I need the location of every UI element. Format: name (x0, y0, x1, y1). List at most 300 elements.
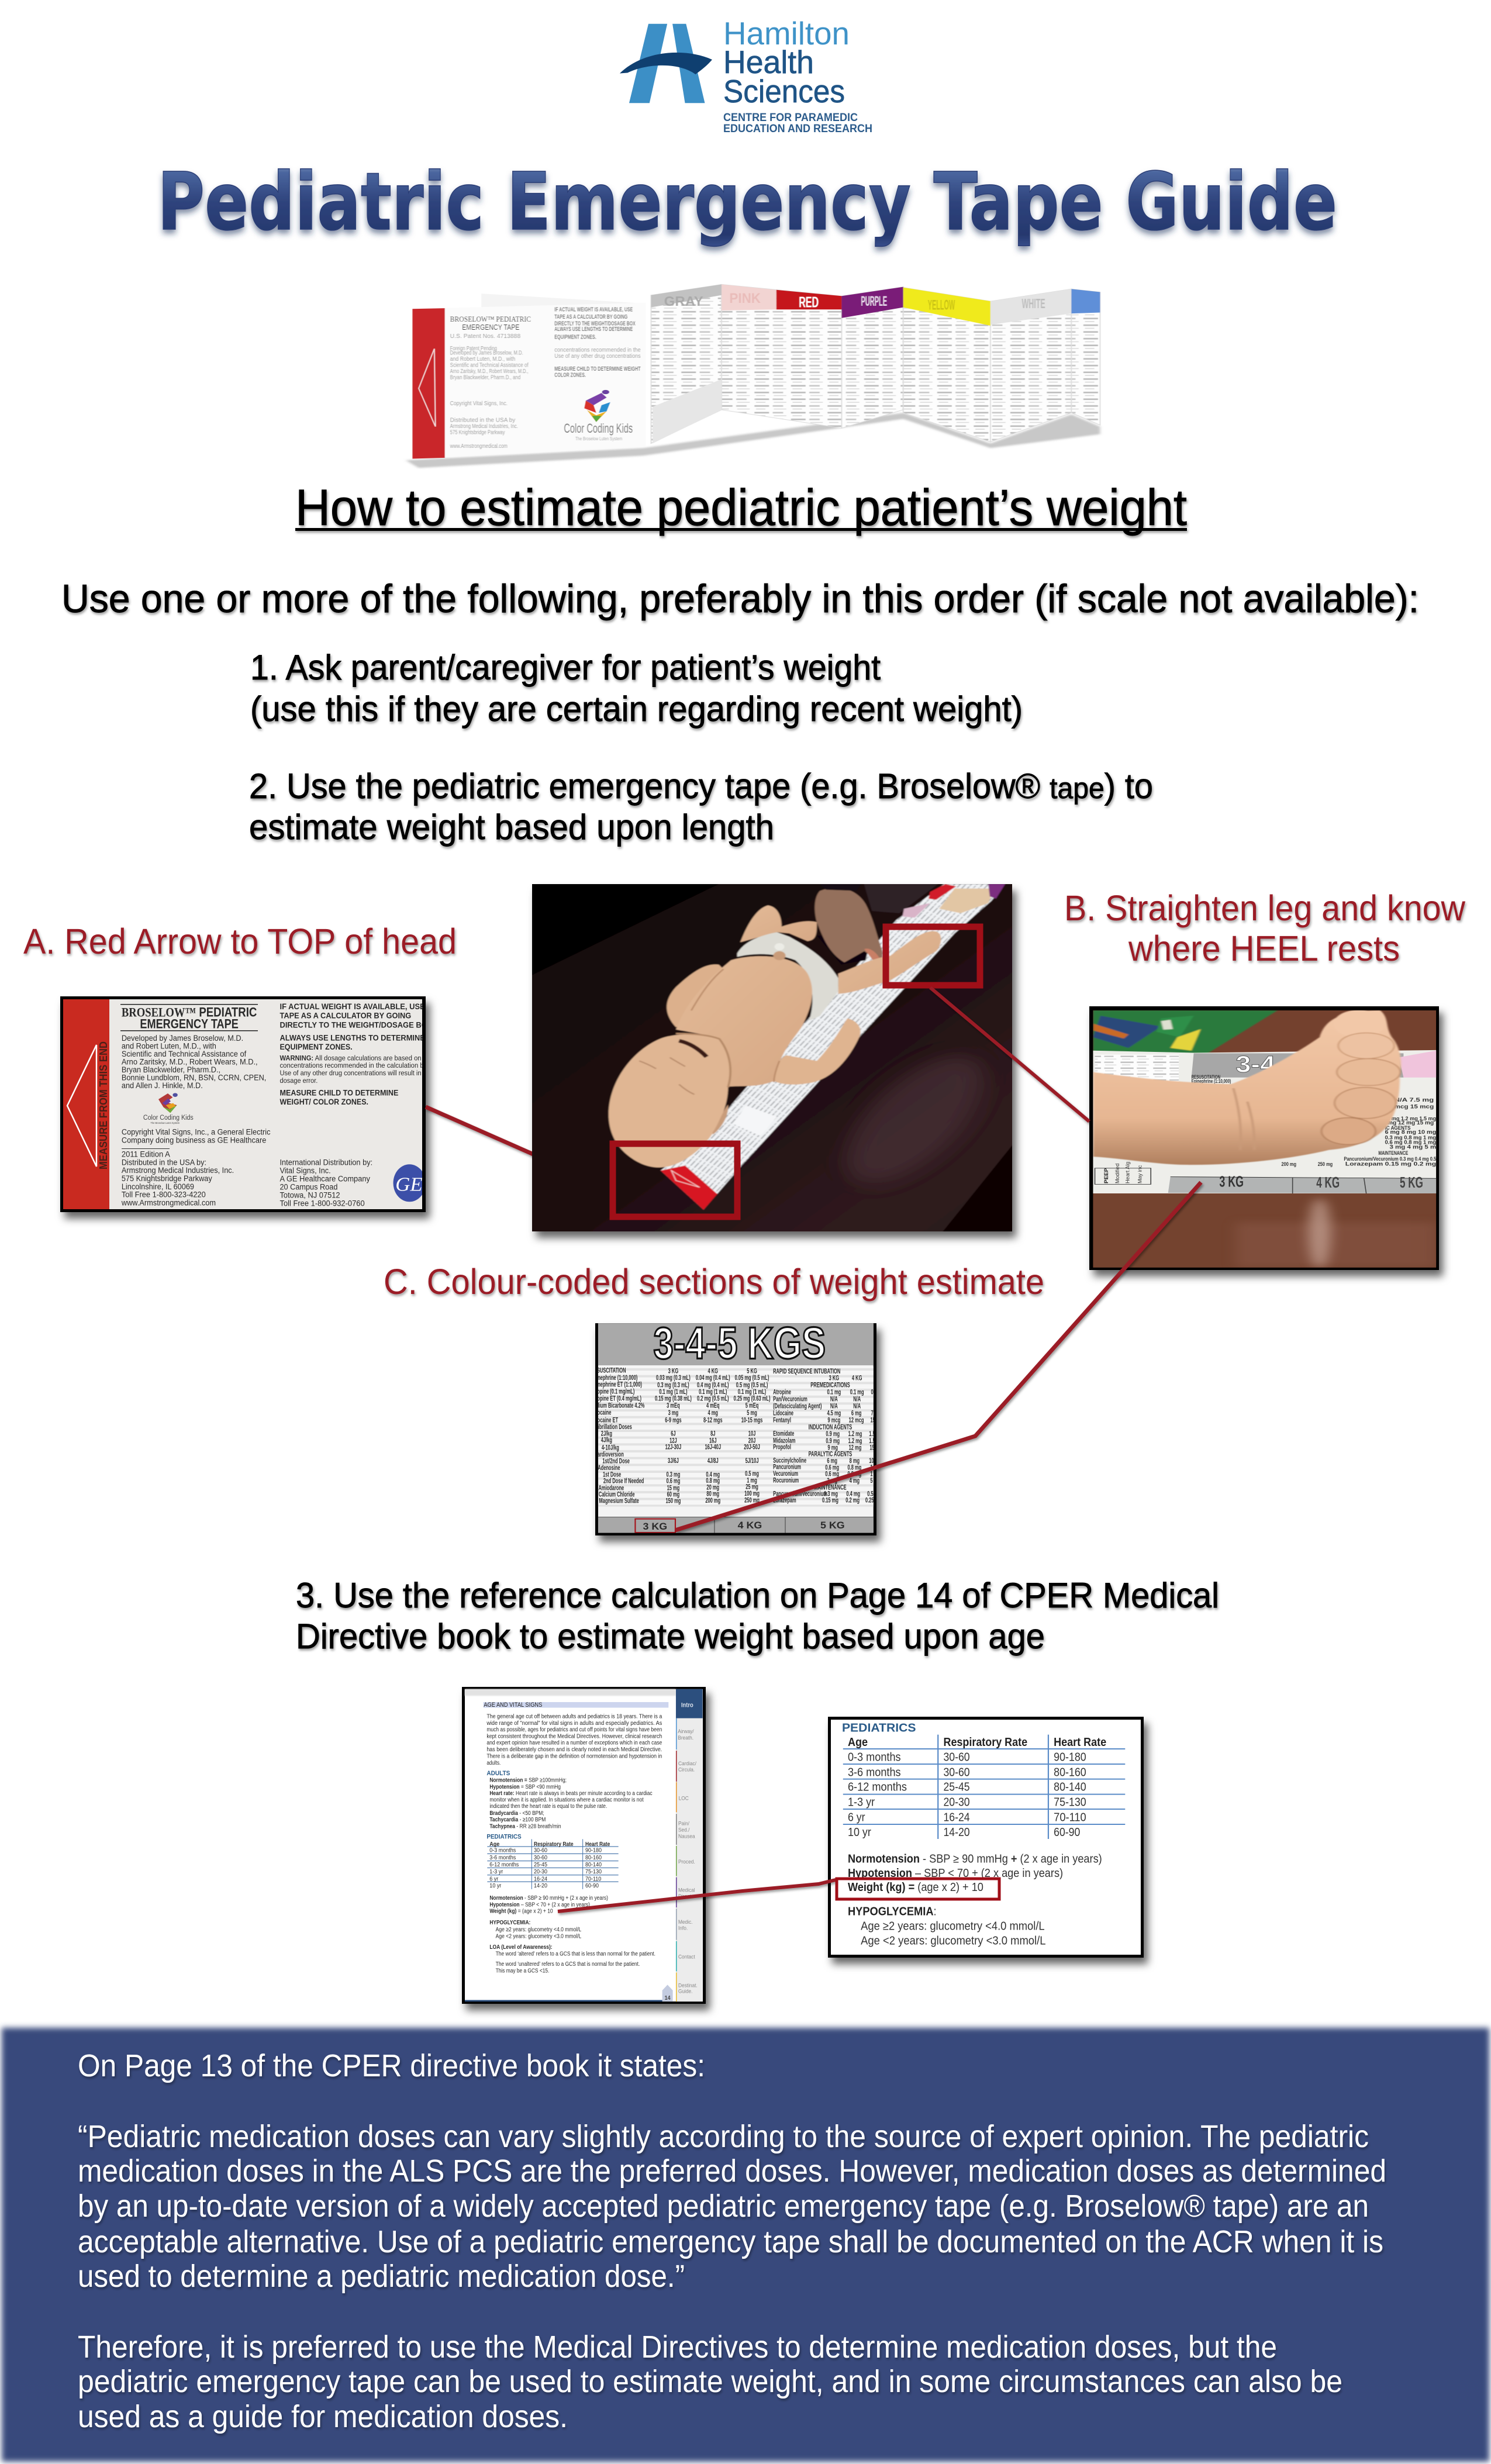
panel C: 3-4-5 KGS tape section (591, 1318, 885, 1535)
rapid sequence intubation table: 0.2 mg (845, 1497, 860, 1504)
page formulas and notes (489, 1895, 655, 1975)
page formulas and notes: The word ‘unaltered’ refers to a GCS that is normal for the patient. (496, 1961, 640, 1968)
paper table text: Epinephrine (1:10,000) (1192, 1078, 1231, 1084)
rapid sequence intubation table: 3 mg (827, 1477, 837, 1485)
card text: DIRECTLY TO THE WEIGHT/DOSAGE BOX (279, 1021, 433, 1030)
image: folded Broselow tape brochure: MEASURE CHILD TO DETERMINE WEIGHT (554, 365, 641, 372)
rapid sequence intubation table: Pancuronium (773, 1464, 801, 1471)
icon: white arrow (67, 1045, 96, 1167)
weight formula: Weight (kg) = (age x 2) + 10 (848, 1881, 983, 1894)
image: folded Broselow tape brochure (406, 284, 1100, 468)
dosage columns 3/4/5 KG: 80 mg (706, 1490, 719, 1498)
paper table text: 5 KG (1400, 1174, 1423, 1191)
brochure back card (481, 294, 643, 428)
paper table text: Modified (1114, 1164, 1120, 1183)
page paragraph (486, 1713, 662, 1766)
pediatrics small table: PEDIATRICS (486, 1834, 522, 1840)
page side tabs (676, 1689, 703, 2001)
rapid sequence intubation table: Succinylcholine (773, 1457, 807, 1465)
brochure panels: PINK (729, 291, 761, 306)
paper table text: N/A 7.5 mg (1394, 1097, 1434, 1103)
step 1 text: 1. Ask parent/caregiver for patient’s weight (250, 648, 881, 687)
rapid sequence intubation table: Atropine (773, 1389, 791, 1396)
rapid sequence intubation table: Etomidate (773, 1430, 795, 1438)
dosage table left labels: Lidocaine (591, 1409, 612, 1417)
vitals table: 3-6 months (848, 1766, 901, 1779)
dosage columns 3/4/5 KG: 0.25 mg (0.63 mL) (734, 1395, 770, 1403)
dosage columns 3/4/5 KG: 12J-30J (665, 1444, 681, 1451)
rapid sequence intubation table: 10 mg (869, 1457, 882, 1465)
vertical tape text: MEASURE FROM THIS END (98, 1041, 109, 1169)
dosage table left labels: 2J/kg (601, 1430, 612, 1438)
brochure cover card: EQUIPMENT ZONES. (554, 334, 596, 340)
page side tabs: Guide. (678, 1988, 693, 1994)
dosage columns 3/4/5 KG: 3 KG (668, 1368, 678, 1375)
rapid sequence intubation table (773, 1368, 885, 1504)
dosage columns 3/4/5 KG: 8J (710, 1430, 715, 1438)
rapid sequence intubation table: 1.5 mg (869, 1437, 883, 1445)
step 3 text: 3. Use the reference calculation on Page 14 of CPER Medical (296, 1576, 1219, 1615)
vitals table: 25-45 (943, 1781, 970, 1793)
page paragraph: wide range of "normal" for vital signs in adults and especially pediatrics. As (486, 1720, 662, 1727)
dosage columns 3/4/5 KG: 4 KG (708, 1368, 718, 1375)
adults section: Tachypnea - RR ≥28 breath/min (489, 1823, 561, 1830)
dosage columns 3/4/5 KG: 6-9 mgs (665, 1417, 682, 1424)
rapid sequence intubation table: 4.5 mg (827, 1410, 841, 1417)
dosage columns 3/4/5 KG: 6J (671, 1430, 676, 1438)
banner text: by an up-to-date version of a widely accepted pediatric emergency tape (e.g. Broselow® tape) are an (78, 2189, 1369, 2224)
card text: Copyright Vital Signs, Inc., a General Electric (122, 1128, 271, 1137)
hypoglycemia notes: Age <2 years: glucometry <3.0 mmol/L (861, 1935, 1046, 1947)
rapid sequence intubation table: PARALYTIC AGENTS (809, 1451, 853, 1458)
rapid sequence intubation table: Lidocaine (773, 1410, 793, 1417)
dosage columns 3/4/5 KG: 0.3 mg (667, 1471, 680, 1479)
dosage table left labels: Atropine (0.1 mg/mL) (591, 1388, 634, 1396)
page side tabs: Medical (678, 1887, 695, 1893)
page formulas and notes: HYPOGLYCEMIA: (489, 1919, 530, 1926)
heading: how to estimate weight: How to estimate pediatric patient’s weight (295, 479, 1187, 536)
rapid sequence intubation table: Fentanyl (773, 1417, 791, 1424)
logo wordmark (723, 15, 872, 135)
dosage table left labels: Lidocaine ET (591, 1417, 618, 1424)
table striping (598, 1366, 874, 1507)
dosage columns 3/4/5 KG: 10-15 mgs (741, 1417, 763, 1424)
vitals table: 60-90 (1054, 1826, 1080, 1839)
pediatrics small table: 70-110 (585, 1876, 602, 1882)
dosage table left labels: Sodium Bicarbonate 4.2% (591, 1402, 645, 1410)
rapid sequence intubation table: 1.5 mg (869, 1430, 883, 1438)
weight footer band: 3 KG (643, 1521, 667, 1532)
paper table text: May inc (1137, 1165, 1143, 1183)
pediatrics small table: Heart Rate (585, 1841, 610, 1848)
adult hand (815, 884, 883, 967)
rapid sequence intubation table: 12 mg (849, 1444, 861, 1452)
label B: B. Straighten leg and know (1064, 888, 1466, 928)
dosage columns 3/4/5 KG: 4 mEq (706, 1402, 720, 1410)
page side tabs: Info. (678, 1925, 688, 1931)
card text: Bonnie Lundblom, RN, BSN, CCRN, CPEN, (122, 1074, 266, 1082)
paper table text: 3-4 (1235, 1051, 1275, 1077)
brochure cover card: Foreign Patent Pending (450, 345, 497, 352)
page inner shading (465, 1689, 676, 1696)
step 1 text: (use this if they are certain regarding recent weight) (250, 689, 1023, 729)
rapid sequence intubation table: 0.9 mg (826, 1430, 840, 1438)
banner text (78, 2048, 1386, 2434)
card text: TAPE AS A CALCULATOR BY GOING (279, 1012, 411, 1020)
vitals table: 75-130 (1054, 1796, 1086, 1809)
rapid sequence intubation table: MAINTENANCE (814, 1484, 847, 1492)
torso (676, 956, 812, 1086)
dosage columns 3/4/5 KG: 25 mg (746, 1483, 758, 1491)
adults section: Normotension = SBP ≥100mmHg; (489, 1777, 567, 1784)
brochure cover card: and Robert Luten, M.D., with (450, 356, 515, 363)
dosage table left labels: Atropine ET (0.4 mg/mL) (591, 1395, 641, 1403)
blood pressure formulas: Normotension - SBP ≥ 90 mmHg + (2 x age in years) (848, 1853, 1102, 1865)
dosage columns 3/4/5 KG: 0.1 mg (1 mL) (699, 1388, 727, 1396)
brochure panels: YELLOW (928, 298, 955, 313)
page formulas and notes: Hypotension – SBP < 70 + (2 x age in years) (489, 1902, 590, 1909)
pediatrics small table: Age (489, 1841, 500, 1848)
brochure cover card: U.S. Patent Nos. 4713888 (450, 333, 520, 340)
rapid sequence intubation table: 5 mg (870, 1477, 881, 1485)
vitals table: Heart Rate (1054, 1736, 1106, 1749)
pediatrics small table (486, 1834, 619, 1889)
pediatrics small table: 30-60 (534, 1854, 548, 1861)
card text: 2011 Edition A (122, 1150, 170, 1159)
dosage columns 3/4/5 KG: 1 mg (747, 1477, 757, 1485)
dosage columns 3/4/5 KG: 3 mg (668, 1409, 678, 1417)
page side tabs: LOC (679, 1795, 689, 1802)
page formulas and notes: LOA (Level of Awareness): (489, 1944, 553, 1951)
card text: The Broselow Luten System (151, 1121, 180, 1125)
card text: Totowa, NJ 07512 (279, 1191, 340, 1200)
dosage table left labels: Adenosine (598, 1464, 620, 1472)
dosage columns 3/4/5 KG: 3 mEq (667, 1402, 680, 1410)
rapid sequence intubation table: Vecuronium (773, 1470, 798, 1478)
rapid sequence intubation table: 8 mg (850, 1457, 860, 1465)
card text: 20 Campus Road (279, 1183, 337, 1192)
logo wordmark: Sciences (723, 73, 845, 109)
pediatrics small table: 60-90 (585, 1883, 599, 1889)
vitals table: 70-110 (1054, 1811, 1086, 1824)
page side tabs: Sed./ (678, 1827, 690, 1833)
brochure panels: PURPLE (861, 294, 887, 309)
pediatrics small table: 1-3 yr (489, 1868, 503, 1875)
dosage table left labels: 4-10J/kg (602, 1444, 619, 1452)
rapid sequence intubation table: Lorazepam (773, 1497, 796, 1504)
rapid sequence intubation table: 0.6 mg (825, 1471, 839, 1478)
dosage columns 3/4/5 KG: 8-12 mgs (703, 1417, 723, 1424)
label A: A. Red Arrow to TOP of head (23, 922, 457, 961)
dosage table left labels: RESUSCITATION (591, 1367, 626, 1375)
card text: EMERGENCY TAPE (140, 1017, 239, 1031)
card text: Armstrong Medical Industries, Inc. (122, 1167, 234, 1175)
dosage table left labels: Epinephrine (1:10,000) (591, 1374, 637, 1382)
brochure cover card: EMERGENCY TAPE (462, 323, 519, 332)
card text: Scientific and Technical Assistance of (122, 1050, 247, 1059)
rapid sequence intubation table: N/A (830, 1396, 838, 1403)
rapid sequence intubation table: 0.15 mg (822, 1497, 838, 1504)
dosage table left labels: Calcium Chloride (599, 1491, 635, 1499)
brochure cover card: Use of any other drug concentrations (554, 353, 641, 360)
dosage columns 3/4/5 KG: 0.05 mg (0.5 mL) (735, 1374, 769, 1382)
connector: panel B heel to 3 KG box (675, 1182, 1201, 1530)
card text: Lincolnshire, IL 60069 (122, 1183, 194, 1191)
page paragraph: much as possible, ages for pediatrics and cut off points for vital signs have been (486, 1727, 662, 1733)
dosage columns 3/4/5 KG: 200 mg (705, 1497, 720, 1505)
brochure cover card: Copyright Vital Signs, Inc. (450, 400, 508, 407)
weight footer band: 4 KG (738, 1520, 762, 1531)
paper table text: 0.9 mg 1.2 mg 1.5 mg (1383, 1116, 1436, 1121)
vitals table: 10 yr (848, 1826, 871, 1839)
rapid sequence intubation table: RAPID SEQUENCE INTUBATION (773, 1368, 840, 1376)
dosage columns 3/4/5 KG: 16J-40J (705, 1444, 721, 1451)
banner text: Therefore, it is preferred to use the Medical Directives to determine medication doses, but the (78, 2330, 1277, 2365)
vitals table (843, 1735, 1125, 1839)
mannequin foot (1093, 1010, 1401, 1165)
highlight box: weight formula (837, 1879, 999, 1899)
step 2 text: estimate weight based upon length (249, 807, 774, 847)
dosage columns 3/4/5 KG: 20J (748, 1437, 755, 1445)
brochure cover card: Bryan Blackwelder, Pharm.D., and (450, 374, 520, 381)
dosage columns 3/4/5 KG: 0.8 mg (706, 1477, 720, 1485)
card text: Company doing business as GE Healthcare (122, 1136, 266, 1145)
pediatrics small table: 30-60 (534, 1847, 548, 1854)
paper table text: PEEP (1103, 1168, 1110, 1183)
card text: Color Coding Kids (143, 1113, 194, 1121)
page side tabs: Breath. (678, 1734, 693, 1741)
rapid sequence intubation table: 0.4 mg (846, 1490, 860, 1498)
rapid sequence intubation table: 1 mg (870, 1471, 881, 1478)
paper table text: IC AGENTS (1385, 1125, 1411, 1131)
card text: www.Armstrongmedical.com (121, 1199, 216, 1207)
highlight box: head (613, 1144, 737, 1217)
brochure panels: WHITE (1022, 296, 1045, 311)
image: folded Broselow tape brochure: DIRECTLY TO THE WEIGHT/DOSAGE BOX (554, 320, 636, 327)
dosage table left labels: 1st Dose (603, 1471, 622, 1479)
vitals table: 90-180 (1054, 1751, 1086, 1764)
brochure panels: GRAY (664, 294, 703, 309)
brochure cover card: 575 Knightsbridge Parkway (450, 429, 505, 436)
dosage columns 3/4/5 KG: 0.2 mg (0.5 mL) (697, 1395, 729, 1403)
rapid sequence intubation table: INDUCTION AGENTS (809, 1424, 853, 1431)
page side tabs: Pain/ (678, 1820, 689, 1826)
rapid sequence intubation table: 7.5 mg (871, 1410, 885, 1417)
page paragraph: The general age cut off between adults and pediatrics is 18 years. There is a (486, 1713, 662, 1720)
rapid sequence intubation table: 0.25 mg (865, 1497, 882, 1504)
pediatrics small table: Respiratory Rate (534, 1841, 574, 1848)
dosage columns 3/4/5 KG: 16J (709, 1437, 717, 1445)
vitals table: 30-60 (943, 1766, 970, 1779)
rapid sequence intubation table: 3 KG (829, 1375, 839, 1382)
hypoglycemia notes: HYPOGLYCEMIA: (848, 1906, 937, 1918)
rapid sequence intubation table: 4 mg (850, 1477, 860, 1485)
adults section: ADULTS (486, 1771, 510, 1777)
paper table text: 6 mg 8 mg 10 mg (1385, 1129, 1436, 1135)
dosage table left labels: Amiodarone (598, 1485, 624, 1492)
step 2 text: 2. Use the pediatric emergency tape (e.g. Broselow® tape) to (249, 767, 1153, 806)
card text: International Distribution by: (279, 1158, 372, 1167)
head (609, 1034, 730, 1168)
vitals table: 80-160 (1054, 1766, 1086, 1779)
weight footer band (598, 1517, 874, 1533)
page side tabs: Nausea (678, 1833, 695, 1840)
pediatrics small table: 75-130 (585, 1868, 602, 1875)
icon: bridge mark (620, 24, 712, 103)
banner: CPER directive statement (2, 2028, 1489, 2462)
card text: WARNING: All dosage calculations are based on (279, 1054, 422, 1062)
card text: dosage error. (279, 1076, 317, 1085)
step 1 text (250, 648, 1023, 729)
highlight box: foot (886, 927, 980, 985)
paper table text: 9 mg 12 mg 15 mg (1383, 1120, 1434, 1126)
dosage columns 3/4/5 KG: 5 KG (747, 1368, 757, 1375)
rapid sequence intubation table: 0.6 mg (825, 1464, 839, 1472)
connector: page formula to excerpt (558, 1880, 836, 1911)
pediatrics small table: 3-6 months (489, 1854, 516, 1861)
page side tabs: Destinat. (678, 1982, 698, 1989)
rapid sequence intubation table: 6 mg (851, 1410, 861, 1417)
image: folded Broselow tape brochure: Color Coding Kids (564, 421, 633, 436)
rapid sequence intubation table: 9 mg (827, 1444, 838, 1452)
page side tabs: Intro (681, 1702, 693, 1709)
paper table text: Heart Alg (1125, 1162, 1131, 1183)
paper table text: 3 KG (1219, 1173, 1244, 1190)
rapid sequence intubation table: 0.3 mg (824, 1490, 838, 1498)
rapid sequence intubation table: 4 KG (852, 1375, 862, 1382)
brochure cover card: Distributed in the USA by (450, 417, 516, 424)
dosage columns 3/4/5 KG: 0.5 mg (745, 1470, 759, 1478)
rapid sequence intubation table: Propofol (773, 1444, 791, 1451)
blood pressure formulas (848, 1853, 1102, 1880)
vitals table: Respiratory Rate (943, 1736, 1027, 1749)
banner text: used to determine a pediatric medication dose.” (78, 2259, 685, 2294)
hypoglycemia notes: Age ≥2 years: glucometry <4.0 mmol/L (861, 1920, 1045, 1932)
vitals table: 16-24 (943, 1811, 970, 1824)
page heading band (484, 1702, 668, 1709)
rapid sequence intubation table: 1 mg (870, 1464, 881, 1472)
vitals table: 6 yr (848, 1811, 865, 1824)
card text: and Robert Luten, M.D., with (122, 1042, 216, 1051)
mannequin limbs (667, 905, 941, 1085)
connector: foot box to panel B (930, 988, 1089, 1121)
paper table text: 0.6 mg 0.8 mg 1 mg (1385, 1139, 1436, 1145)
page formulas and notes: Age <2 years: glucometry <3.0 mmol/L (496, 1933, 582, 1940)
rapid sequence intubation table: 1.2 mg (848, 1430, 862, 1438)
brochure cover card: Armstrong Medical Industries, Inc. (450, 423, 518, 430)
dosage table left labels: Epinephrine ET (1:1,000) (591, 1381, 642, 1389)
logo wordmark: Health (723, 44, 814, 80)
label C: C. Colour-coded sections of weight estimate (384, 1262, 1044, 1302)
banner text: used as a guide for medication doses. (78, 2399, 568, 2434)
card text: ALWAYS USE LENGTHS TO DETERMINE (279, 1034, 425, 1043)
dosage columns 3/4/5 KG: 0.3 mg (0.3 mL) (657, 1382, 689, 1389)
brochure cover card (412, 303, 646, 458)
card text: and Allen J. Hinkle, M.D. (122, 1082, 203, 1090)
card text: BROSELOW™ PEDIATRIC (122, 1005, 257, 1020)
card text: EQUIPMENT ZONES. (279, 1043, 353, 1052)
brochure cover card: Scientific and Technical Assistance of (450, 362, 529, 368)
paper table text: 0.3 mg 0.8 mg 1 mg (1385, 1134, 1436, 1140)
panel: CPER directive book page 14 (462, 1687, 706, 2004)
subheading: use one or more: Use one or more of the following, preferably in this order (if scale not available): (61, 577, 1419, 621)
adults section: Hypotension = SBP <90 mmHg (489, 1783, 561, 1790)
dosage table left labels: Defibrillation Doses (591, 1423, 632, 1431)
dosage columns 3/4/5 KG (655, 1368, 770, 1505)
paper table text: RESUSCITATION (1192, 1074, 1220, 1080)
page paragraph: kept consistent throughout the Medical Directives. However, clinical research (486, 1733, 662, 1740)
dosage table left labels: 2nd Dose If Needed (603, 1478, 644, 1485)
dosage columns 3/4/5 KG: 0.04 mg (0.4 mL) (696, 1374, 730, 1382)
page formulas and notes: Weight (kg) = (age x 2) + 10 (489, 1908, 553, 1915)
dosage table left labels: Cardioversion (594, 1451, 624, 1459)
brochure panels (406, 284, 1100, 468)
measuring tape (661, 884, 1005, 1210)
banner text: medication doses in the ALS PCS are the preferred doses. However, medication doses as determined (78, 2154, 1386, 2189)
page number tab: 14 (665, 1995, 671, 2001)
brochure cover card: www.Armstrongmedical.com (450, 443, 508, 450)
pediatrics small table: 90-180 (585, 1847, 602, 1854)
rapid sequence intubation table: 9 mcg (828, 1417, 840, 1424)
dosage columns 3/4/5 KG: 20 mg (706, 1484, 719, 1492)
dosage columns 3/4/5 KG: 0.4 mg (0.4 mL) (697, 1382, 729, 1389)
brochure panels: RED (799, 294, 819, 310)
page paragraph: adults. (486, 1759, 501, 1766)
card text: WEIGHT/ COLOR ZONES. (279, 1098, 368, 1106)
rapid sequence intubation table: 0.9 mg (826, 1437, 840, 1445)
rapid sequence intubation table: 1.2 mg (848, 1437, 862, 1445)
dosage columns 3/4/5 KG: 150 mg (665, 1497, 681, 1505)
page side tabs: Circula. (678, 1766, 695, 1773)
icon: GE logo (393, 1164, 422, 1202)
vitals table: 6-12 months (848, 1781, 907, 1793)
page number tab (465, 1985, 673, 2001)
dosage columns 3/4/5 KG: 5 mg (747, 1409, 757, 1417)
dosage columns 3/4/5 KG: 0.6 mg (667, 1478, 680, 1485)
image: folded Broselow tape brochure: ALWAYS USE LENGTHS TO DETERMINE (554, 326, 633, 333)
panel A: tape cover card (60, 996, 433, 1212)
weight footer band: 5 KG (820, 1520, 845, 1531)
blood pressure formulas: Hypotension – SBP < 70 + (2 x age in years) (848, 1867, 1063, 1880)
icon: Color Coding Kids mark (158, 1093, 178, 1113)
dosage columns 3/4/5 KG: 0.15 mg (0.38 mL) (655, 1395, 692, 1403)
paper table text: 3 mg 4 mg 5 m (1389, 1144, 1436, 1150)
brochure cover card: COLOR ZONES. (554, 372, 586, 378)
brochure cover card: BROSELOW™ PEDIATRIC (450, 315, 531, 323)
adults section: monitor when it is applied. In situations where a cardiac monitor is not (489, 1797, 644, 1803)
page side tabs: Direct. (678, 1893, 692, 1899)
dosage table left labels: 1st/2nd Dose (602, 1458, 630, 1465)
page side tabs: Proced. (678, 1859, 695, 1865)
paper table text: MAINTENANCE (1378, 1150, 1409, 1156)
pediatrics small table: 14-20 (534, 1883, 548, 1889)
dosage columns 3/4/5 KG: 250 mg (744, 1497, 760, 1504)
rapid sequence intubation table: Midazolam (773, 1437, 796, 1445)
dosage columns 3/4/5 KG: 4J/8J (707, 1457, 719, 1465)
card text: Toll Free 1-800-932-0760 (279, 1199, 365, 1208)
page side tabs: Airway/ (678, 1728, 694, 1734)
vitals table: 14-20 (943, 1826, 970, 1839)
paper table text: 4 KG (1316, 1174, 1340, 1191)
logo wordmark: Hamilton (723, 15, 850, 51)
rapid sequence intubation table: N/A (853, 1403, 861, 1410)
page side tabs: Contact (678, 1954, 695, 1960)
rapid sequence intubation table: (Defasciculating Agent) (773, 1403, 822, 1410)
card text: A GE Healthcare Company (279, 1175, 370, 1183)
dosage columns 3/4/5 KG: 60 mg (667, 1491, 679, 1499)
rapid sequence intubation table: 0.1 mg (827, 1389, 841, 1396)
pediatrics small table: 20-30 (534, 1868, 548, 1875)
